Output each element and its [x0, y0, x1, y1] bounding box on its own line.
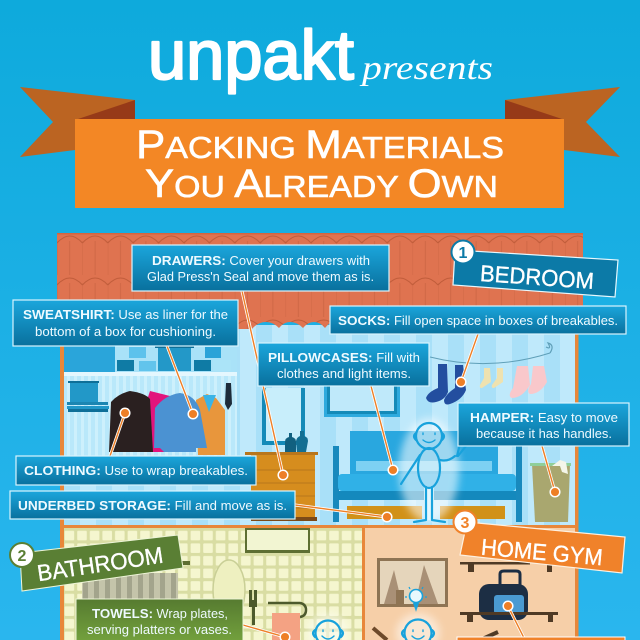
- hamper: [530, 460, 571, 522]
- dresser: [245, 452, 318, 521]
- label: bedroom: 1: [459, 245, 468, 262]
- mirror: [262, 388, 305, 445]
- shower curtain: [82, 573, 178, 599]
- callout: towels: [76, 599, 243, 640]
- stick figure: bedroom: [399, 418, 466, 522]
- callout: drawers: DRAWERS: Cover your drawers with: [152, 253, 370, 268]
- wall picture: [324, 380, 400, 417]
- label: home gym: [454, 510, 625, 573]
- callout: towels: TOWELS: Wrap plates,: [92, 606, 228, 621]
- bottles: [285, 431, 308, 452]
- home gym: [362, 528, 575, 640]
- mattress: [338, 474, 516, 491]
- label: home gym: 3: [461, 515, 470, 532]
- ribbon left tail: [20, 87, 135, 157]
- right outer wall: [575, 330, 578, 640]
- title line 2: YOU ALREADY OWN: [145, 162, 498, 206]
- bedroom wall: [60, 325, 578, 528]
- striped socks: [480, 368, 503, 388]
- callout: clothing: [16, 456, 256, 485]
- house walls: [60, 325, 578, 640]
- lower shelf: [460, 612, 558, 622]
- presents script: presents: [360, 50, 493, 87]
- blue socks: [426, 364, 466, 404]
- callout: sweatshirt: bottom of a box for cushioning.: [35, 325, 216, 339]
- bulb icon: [405, 587, 427, 612]
- closet shelf shadow panel: [64, 345, 115, 372]
- callout: pillowcases: [258, 343, 429, 386]
- bathroom tiled wall: [64, 528, 362, 640]
- stick figure head: gym: [396, 613, 440, 640]
- shelf support right: [547, 564, 552, 572]
- callout: sweatshirt: [13, 300, 238, 346]
- label: bedroom: BEDROOM: [479, 260, 595, 294]
- left outer wall: [60, 330, 64, 640]
- pink socks: [510, 366, 547, 398]
- bed base: [338, 491, 516, 500]
- callout: underbed storage: UNDERBED STORAGE: Fill and move as is.: [18, 498, 287, 513]
- leader lines: [110, 291, 560, 640]
- roof: [57, 233, 583, 329]
- closet hanging area: [64, 376, 237, 458]
- floor line: [60, 525, 578, 528]
- logo: unpakt: unpakt: [148, 16, 354, 94]
- title line 1: PACKING MATERIALS: [136, 123, 504, 167]
- ribbon main panel: [75, 119, 564, 208]
- pillow: [356, 461, 492, 471]
- blue hoodie: [154, 393, 207, 452]
- magenta shirt: [130, 391, 170, 452]
- label: bathroom: [10, 535, 183, 591]
- sepia picture: [377, 558, 448, 607]
- towel: [272, 613, 300, 640]
- callout: towels: serving platters or vases.: [87, 623, 232, 637]
- bathroom window: [245, 528, 310, 553]
- curtain rod bracket: [180, 561, 190, 565]
- dividing wall: [362, 528, 365, 640]
- ribbon right fold: [505, 100, 562, 119]
- upper shelf: [460, 562, 530, 572]
- gym wall: [365, 528, 575, 640]
- gym prop right: [480, 632, 498, 640]
- orange jacket: [196, 394, 225, 455]
- bedposts: [333, 446, 522, 522]
- stick figure head: bathroom: [308, 613, 348, 640]
- callout: clothing: CLOTHING: Use to wrap breakables.: [24, 463, 248, 478]
- clothesline: [426, 343, 552, 404]
- callout: gym, cropped at page bottom: [457, 637, 625, 640]
- closet upper area: [64, 340, 237, 375]
- black blazer: [109, 391, 153, 452]
- shelf boxes: [117, 346, 231, 371]
- callout: socks: [330, 306, 626, 334]
- jacket inner: [203, 395, 216, 412]
- ribbon banner: [20, 87, 620, 208]
- bed: [333, 431, 522, 522]
- oval toilet seat: [213, 560, 245, 620]
- ribbon right tail: [505, 87, 620, 157]
- callout: pillowcases: PILLOWCASES: Fill with: [268, 350, 420, 365]
- callout: sweatshirt: SWEATSHIRT: Use as liner for the: [23, 307, 228, 322]
- callout: socks: SOCKS: Fill open space in boxes of breakables.: [338, 313, 618, 328]
- towel bar: [268, 603, 306, 617]
- label: bedroom: [452, 240, 618, 297]
- folded stack: [67, 381, 109, 412]
- faucet: [249, 590, 257, 625]
- headboard: [350, 431, 498, 475]
- label: bathroom: 2: [18, 548, 27, 565]
- underbed storage boxes: [347, 506, 505, 519]
- callout: hamper: HAMPER: Easy to move: [470, 410, 618, 425]
- callout: pillowcases: clothes and light items.: [277, 367, 411, 381]
- duffel bag: [479, 571, 528, 620]
- bathroom: [64, 528, 362, 640]
- label: bathroom: BATHROOM: [35, 542, 165, 586]
- callout: hamper: because it has handles.: [476, 427, 612, 441]
- label: home gym: HOME GYM: [480, 534, 604, 570]
- callout: underbed storage: [10, 491, 295, 519]
- callout: hamper: [458, 403, 629, 446]
- callout: drawers: Glad Press'n Seal and move them as is.: [147, 270, 374, 284]
- ribbon left fold: [78, 100, 135, 119]
- closet: [64, 340, 237, 458]
- gym prop: [373, 628, 387, 640]
- tie: [225, 383, 232, 410]
- closet shelf: [64, 372, 237, 376]
- callout: drawers: [132, 245, 389, 291]
